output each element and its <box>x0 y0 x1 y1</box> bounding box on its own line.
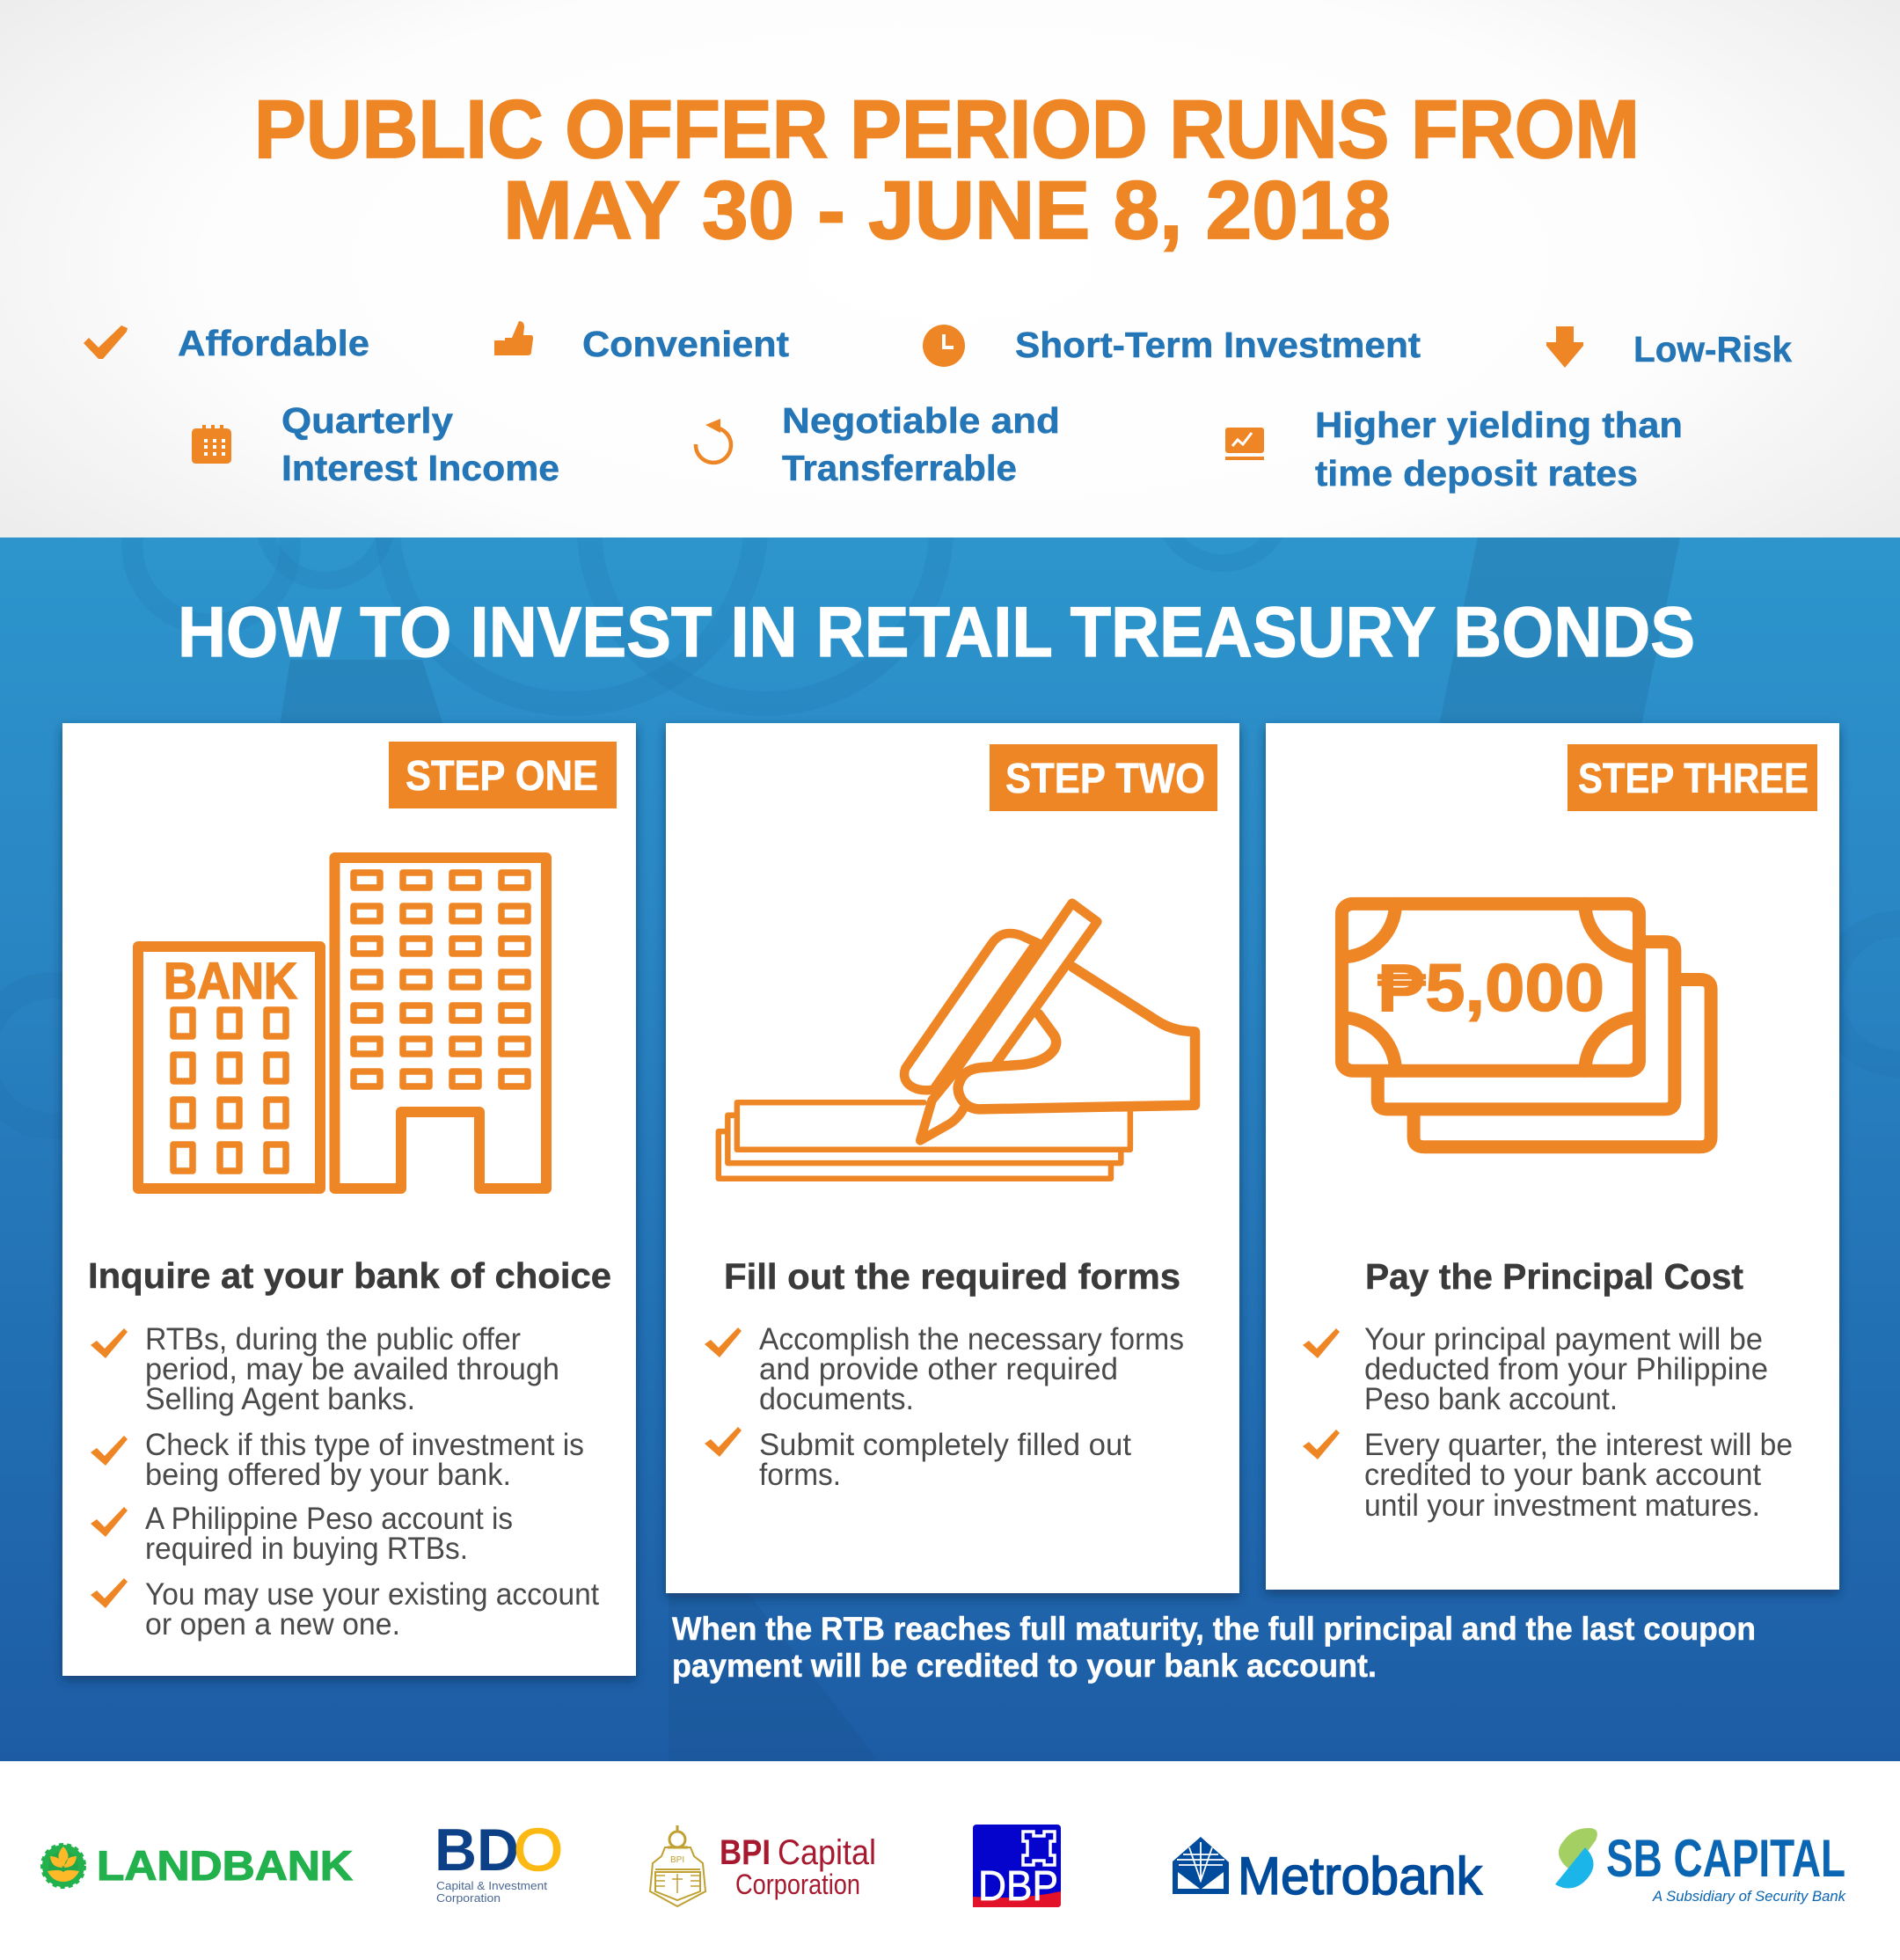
feature: higher yielding: Higher yielding than <box>1315 405 1683 445</box>
features list <box>84 321 1792 494</box>
feature: low-risk <box>1546 326 1792 369</box>
logo: BPI Capital: BPI <box>720 1833 771 1872</box>
maturity note: payment will be credited to your bank account. <box>672 1648 1377 1684</box>
feature: affordable: Affordable <box>178 323 369 363</box>
step three list: Every quarter, the interest will be <box>1364 1428 1793 1462</box>
logo: SB Capital: A Subsidiary of Security Bank <box>1652 1888 1846 1905</box>
logo: DBP: DBP <box>978 1863 1058 1910</box>
icon: peso bills <box>1341 903 1711 1147</box>
top background <box>0 0 1900 538</box>
step two badge: STEP TWO <box>1005 756 1205 802</box>
feature: convenient: Convenient <box>582 324 789 364</box>
step one list: Check if this type of investment is <box>145 1428 584 1462</box>
step three list: Peso bank account. <box>1364 1382 1618 1416</box>
feature: affordable <box>84 323 369 363</box>
step one badge <box>389 742 617 808</box>
logo: BPI Capital: Capital <box>778 1833 876 1872</box>
logo: DBP <box>973 1825 1061 1910</box>
step two heading: Fill out the required forms <box>724 1256 1180 1297</box>
panel: step two <box>666 723 1239 1593</box>
step three list: until your investment matures. <box>1364 1488 1760 1523</box>
logo: Metrobank <box>1173 1837 1483 1905</box>
feature: negotiable and transferable: Negotiable and <box>782 400 1060 441</box>
logo: BPI Capital <box>650 1825 876 1906</box>
panel: step one <box>62 723 636 1676</box>
step one list: You may use your existing account <box>145 1577 599 1612</box>
feature: higher yielding <box>1225 405 1683 494</box>
logo: BDO: Corporation <box>436 1891 501 1905</box>
step three heading: Pay the Principal Cost <box>1365 1256 1743 1297</box>
step one list: or open a new one. <box>145 1607 400 1642</box>
logo: landbank: LANDBANK <box>97 1842 353 1889</box>
icon: hand writing on papers <box>719 903 1195 1179</box>
step two list: and provide other required <box>759 1352 1118 1386</box>
step two list: documents. <box>759 1382 914 1416</box>
feature: short-term investment: Short-Term Investment <box>1015 325 1421 365</box>
feature: quarterly interest income: Interest Income <box>281 448 559 488</box>
step three list: deducted from your Philippine <box>1364 1352 1768 1386</box>
step one list: being offered by your bank. <box>145 1458 511 1492</box>
step three list <box>1303 1322 1793 1523</box>
step two badge <box>990 744 1217 811</box>
logo: BPI Capital: BPI <box>670 1855 684 1865</box>
logo: BPI Capital: Corporation <box>735 1869 860 1900</box>
title: PUBLIC OFFER PERIOD RUNS FROM <box>254 83 1640 175</box>
feature: convenient <box>494 321 789 364</box>
step one heading: Inquire at your bank of choice <box>88 1255 611 1296</box>
feature: negotiable and transferable <box>696 400 1060 488</box>
step three badge: STEP THREE <box>1578 756 1809 802</box>
step one list: period, may be availed through <box>145 1352 559 1386</box>
title: MAY 30 - JUNE 8, 2018 <box>503 164 1391 256</box>
section heading: HOW TO INVEST IN RETAIL TREASURY BONDS <box>178 593 1695 672</box>
step three badge <box>1568 744 1817 811</box>
icon: peso bills: ₱5,000 <box>1378 951 1604 1026</box>
feature: negotiable and transferable: Transferrable <box>782 448 1017 488</box>
title <box>254 83 1640 256</box>
logo: Metrobank: Metrobank <box>1238 1847 1483 1905</box>
logo: BDO <box>435 1817 563 1905</box>
logo: BDO: Capital & Investment <box>436 1879 547 1892</box>
step three list: credited to your bank account <box>1364 1458 1761 1492</box>
step two list <box>705 1322 1184 1492</box>
step two list: forms. <box>759 1458 841 1492</box>
step three list: Your principal payment will be <box>1364 1322 1763 1357</box>
blue section background <box>0 538 1900 1762</box>
feature: low-risk: Low-Risk <box>1633 329 1792 369</box>
step one list: A Philippine Peso account is <box>145 1502 513 1536</box>
feature: quarterly interest income: Quarterly <box>281 400 453 441</box>
step one list: Selling Agent banks. <box>145 1382 415 1416</box>
background watermark pattern <box>276 538 1680 1682</box>
logo: BDO: BD <box>435 1817 519 1883</box>
panel: step three <box>1266 723 1839 1590</box>
logo: SB Capital <box>1555 1828 1846 1905</box>
step one badge: STEP ONE <box>406 753 598 800</box>
footer background <box>0 1761 1900 1960</box>
icon: bank buildings <box>138 858 546 1188</box>
feature: higher yielding: time deposit rates <box>1315 453 1638 494</box>
step one list: required in buying RTBs. <box>145 1532 468 1566</box>
step one list <box>91 1322 599 1642</box>
feature: quarterly interest income <box>192 400 559 488</box>
maturity note: When the RTB reaches full maturity, the full principal and the last coupon <box>672 1611 1756 1647</box>
step one list: RTBs, during the public offer <box>145 1322 521 1357</box>
icon: bank buildings: BANK <box>164 953 297 1010</box>
logo: BDO: O <box>514 1817 563 1883</box>
step two list: Accomplish the necessary forms <box>759 1322 1184 1357</box>
maturity note <box>672 1611 1756 1684</box>
step two list: Submit completely filled out <box>759 1428 1131 1462</box>
